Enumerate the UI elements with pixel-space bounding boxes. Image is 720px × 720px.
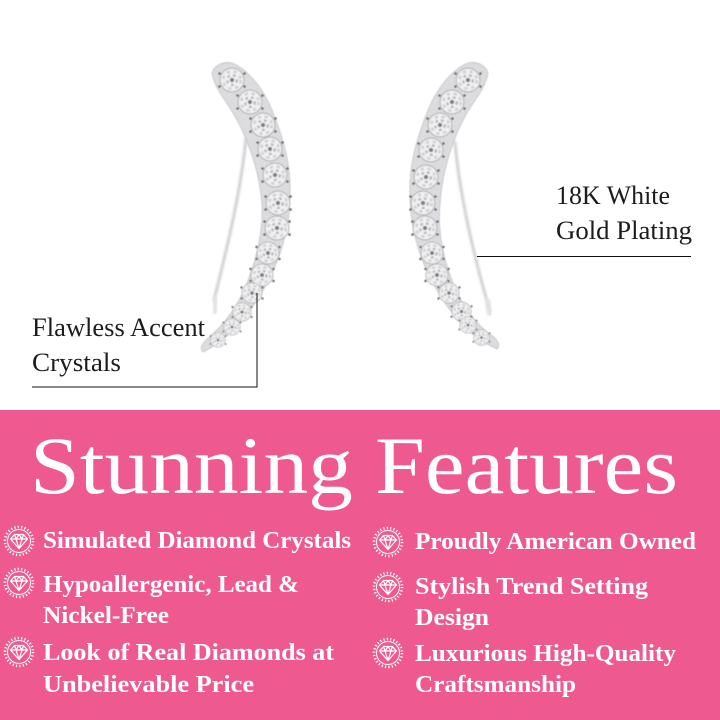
feature: stylish trend setting design bbox=[374, 573, 648, 631]
feature: look of real diamonds bbox=[5, 638, 334, 698]
feature: luxurious craftsmanship: Luxurious High-Quality bbox=[415, 641, 676, 667]
feature: stylish trend setting design: Design bbox=[415, 605, 489, 631]
panel: pink features band bbox=[0, 410, 720, 720]
feature: stylish trend setting design: Stylish Trend Setting bbox=[415, 574, 648, 600]
feature: hypoallergenic bbox=[5, 569, 299, 629]
feature: proudly american owned: Proudly American Owned bbox=[415, 529, 697, 555]
feature: look of real diamonds: Unbelievable Price bbox=[43, 672, 254, 698]
feature: hypoallergenic: Nickel-Free bbox=[43, 603, 169, 629]
callout: white gold plating: 18K White bbox=[556, 181, 670, 210]
feature: luxurious craftsmanship: Craftsmanship bbox=[415, 672, 576, 698]
feature: simulated diamond crystals: Simulated Diamond Crystals bbox=[43, 528, 351, 554]
heading: Stunning Features bbox=[30, 420, 678, 511]
callout: flawless accent crystals: Flawless Accent bbox=[32, 313, 206, 342]
feature: luxurious craftsmanship bbox=[374, 639, 676, 698]
callout: flawless accent crystals: Crystals bbox=[32, 348, 121, 377]
feature: hypoallergenic: Hypoallergenic, Lead & bbox=[43, 572, 299, 598]
right earring bbox=[409, 62, 499, 349]
callout: flawless accent crystals bbox=[32, 293, 257, 387]
panel: product photo of earrings bbox=[201, 62, 499, 352]
callout: white gold plating: Gold Plating bbox=[556, 216, 692, 245]
left earring bbox=[201, 62, 292, 352]
feature: look of real diamonds: Look of Real Diamonds at bbox=[43, 640, 334, 666]
callout: white gold plating bbox=[477, 181, 692, 256]
